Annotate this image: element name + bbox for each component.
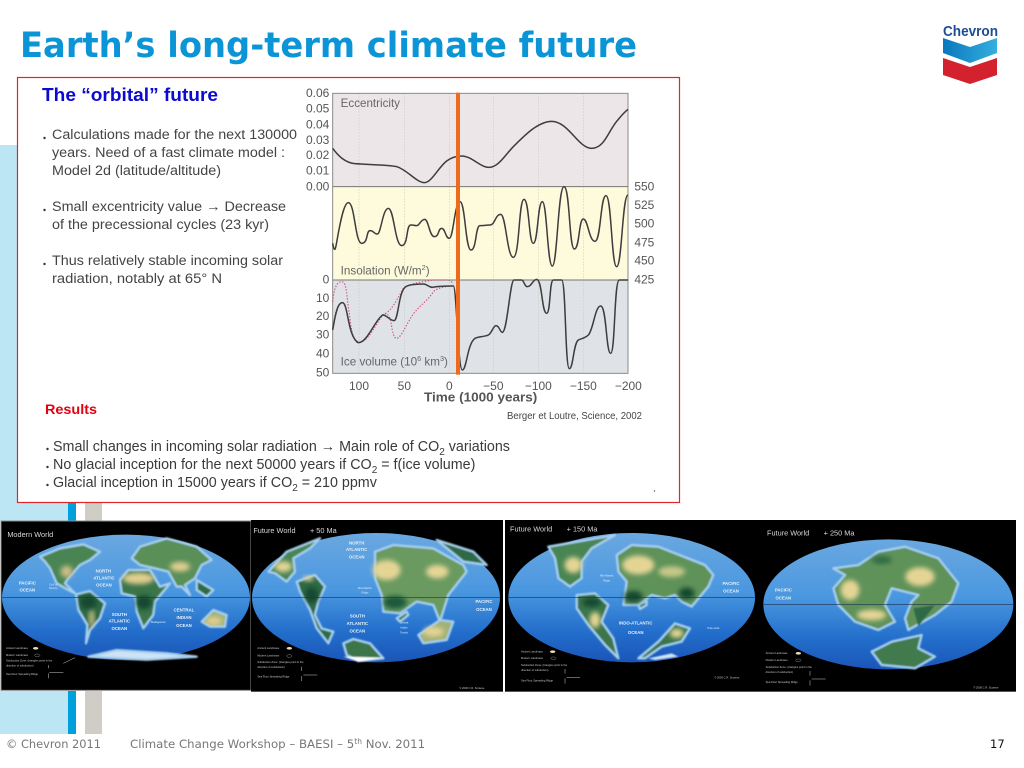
- map labels: OCEAN: [776, 596, 791, 601]
- text block: orbital bullets: Small excentricity value → Decrease: [52, 199, 286, 215]
- chart band: eccentricity: [333, 93, 628, 187]
- map legend: direction of subduction): [766, 670, 793, 674]
- axis labels: time: −50: [483, 379, 504, 393]
- map legend: © 2000 C.R. Scotese: [714, 675, 740, 679]
- axis labels: insolation scale: 550: [634, 179, 655, 193]
- text block: results bullets: = f(ice volume): [377, 457, 475, 473]
- map legend: Ancient Landmass: [766, 651, 788, 655]
- map legend: Subduction Zone: (triangles point in the: [766, 665, 812, 669]
- map legend: [257, 646, 485, 690]
- map labels: ATLANTIC: [346, 547, 367, 552]
- text block: results bullets: = 210 ppmv: [298, 475, 378, 491]
- map legend: Modern Landmass: [6, 653, 29, 657]
- map labels: OCEAN: [723, 588, 739, 593]
- axis labels: ice volume scale: 50: [316, 365, 330, 379]
- footer: workshop: Climate Change Workshop – BAESI – 5: [130, 737, 354, 751]
- axis labels: eccentricity scale: 0.03: [306, 133, 330, 147]
- map labels: Trench: [400, 630, 409, 634]
- map labels: Future World: [253, 526, 296, 535]
- marker: present-day orange bar: [456, 93, 460, 375]
- band label: ice volume: Ice volume (10: [341, 355, 417, 368]
- citation: Berger et Loutre, Science, 2002: [507, 410, 642, 422]
- line: insolation: [333, 187, 628, 267]
- text block: results bullets: Glacial inception in 15000 years if CO: [53, 475, 292, 491]
- map labels: + 250 Ma: [824, 528, 855, 537]
- map legend: Ancient Landmass: [6, 646, 29, 650]
- map labels: Future World: [767, 528, 809, 537]
- axis labels: eccentricity scale: 0.04: [306, 117, 330, 131]
- band label: insolation: Insolation (W/m: [341, 264, 422, 277]
- ice volume dotted record: [333, 280, 453, 343]
- logo: Chevron: [943, 24, 998, 84]
- map labels: Madagascar: [151, 620, 166, 624]
- map: Future World +50 Ma: [251, 520, 503, 692]
- map labels: [767, 528, 855, 601]
- text block: results bullets: 2: [292, 483, 298, 494]
- axis title: Time (1000 years): [424, 390, 537, 405]
- map labels: Ridge: [603, 579, 611, 583]
- text block: orbital bullets: Calculations made for the next 130000: [52, 127, 297, 143]
- map legend: direction of subduction): [6, 663, 34, 667]
- axis labels: insolation scale: 450: [634, 254, 655, 268]
- map labels: SOUTH: [112, 612, 127, 617]
- map labels: PACIFIC: [475, 599, 492, 604]
- map labels: + 50 Ma: [310, 526, 338, 535]
- map labels: Central: [400, 620, 409, 624]
- axis labels: time: −200: [615, 379, 642, 393]
- map labels: ATLANTIC: [109, 619, 130, 624]
- axis labels: insolation scale: 425: [634, 272, 655, 286]
- footer: copyright: © Chevron 2011: [6, 737, 101, 751]
- axis labels: eccentricity scale: [306, 86, 330, 194]
- axis labels: ice volume scale: 40: [316, 346, 330, 360]
- axis labels: time: −100: [525, 379, 552, 393]
- map legend: Subduction Zone: (triangles point in the: [257, 660, 304, 664]
- axis labels: time: −150: [570, 379, 597, 393]
- band label: insolation: 2: [422, 263, 426, 272]
- map labels: OCEAN: [628, 630, 643, 635]
- band label: ice volume: 3: [440, 354, 444, 363]
- map labels: Future World: [510, 524, 552, 533]
- map labels: OCEAN: [176, 623, 192, 628]
- heading: results: Results: [45, 402, 97, 417]
- map labels: NORTH: [349, 540, 364, 545]
- map labels: CENTRAL: [174, 608, 195, 613]
- map labels: PACIFIC: [775, 588, 792, 593]
- axis labels: eccentricity scale: 0.00: [306, 180, 330, 194]
- map labels: OCEAN: [112, 626, 127, 631]
- footer: workshop: th: [354, 737, 362, 746]
- map labels: OCEAN: [349, 554, 364, 559]
- map legend: Sea Floor Spreading Ridge: [766, 680, 798, 684]
- map labels: Pole-strait: [707, 626, 720, 630]
- map labels: [7, 530, 195, 631]
- map labels: Mexico: [49, 586, 58, 590]
- map legend: Subduction Zone: (triangles point in the: [6, 658, 53, 662]
- land: [548, 535, 713, 658]
- text block: results bullets: [46, 439, 655, 494]
- text block: results bullets: No glacial inception for the next 50000 years if CO: [53, 457, 372, 473]
- title: Earth’s long-term climate future: [20, 26, 637, 66]
- chart: eccentricity, insolation, ice volume: [306, 86, 655, 405]
- map labels: Indian: [400, 625, 408, 629]
- axis labels: ice volume scale: 10: [316, 291, 330, 305]
- map: Modern World: [1, 521, 251, 690]
- map legend: Ancient Landmass: [257, 646, 280, 650]
- map labels: NORTH: [96, 568, 111, 573]
- map labels: PACIFIC: [722, 581, 739, 586]
- map labels: Ridge: [362, 590, 369, 594]
- axis labels: insolation scale: 475: [634, 235, 655, 249]
- map labels: Mid-Atlantic: [600, 573, 614, 577]
- text block: orbital bullets: Model 2d (latitude/altitude): [52, 163, 221, 179]
- left decorative colour bands: [0, 145, 102, 734]
- text block: results bullets: 2: [372, 465, 378, 476]
- map labels: OCEAN: [20, 588, 35, 593]
- land: [833, 547, 958, 668]
- axis labels: ice volume scale: 0: [323, 273, 330, 287]
- map legend: direction of subduction): [521, 668, 549, 672]
- land: [40, 538, 227, 660]
- chart band: ice volume: [333, 280, 628, 373]
- text block: orbital bullets: of the precessional cycles (23 kyr): [52, 217, 269, 233]
- axis labels: time: [349, 379, 642, 393]
- map legend: [521, 649, 740, 684]
- band label: eccentricity: Eccentricity: [341, 97, 400, 110]
- panel: orbital future: [18, 78, 680, 502]
- map labels: PACIFIC: [19, 580, 36, 585]
- map labels: Mid-Atlantic: [358, 586, 373, 590]
- axis labels: ice volume scale: 30: [316, 327, 330, 341]
- axis labels: time: 50: [398, 379, 411, 393]
- map legend: Modern Landmass: [521, 656, 544, 660]
- map legend: Subduction Zone: (triangles point in the: [521, 663, 568, 667]
- axis labels: time: 0: [446, 379, 453, 393]
- line: eccentricity: [333, 109, 628, 183]
- text block: orbital bullets: years. Need of a fast climate model :: [52, 145, 285, 161]
- axis labels: insolation scale: [634, 179, 655, 286]
- map legend: [6, 646, 75, 678]
- map legend: [766, 651, 999, 690]
- axis labels: insolation scale: 500: [634, 217, 655, 231]
- footer: page number: 17: [990, 737, 1005, 751]
- map legend: Ancient Landmass: [521, 649, 544, 653]
- footer: workshop: Nov. 2011: [362, 737, 425, 751]
- axis labels: eccentricity scale: 0.02: [306, 148, 330, 162]
- band label: ice volume: 6: [417, 354, 421, 363]
- heading: orbital future: The “orbital” future: [42, 85, 218, 105]
- axis labels: ice volume scale: [316, 273, 330, 379]
- map labels: + 150 Ma: [567, 524, 598, 533]
- axis labels: insolation scale: 525: [634, 198, 655, 212]
- band label: ice volume: ): [444, 355, 448, 368]
- map labels: [510, 524, 739, 635]
- map: Future World +150 Ma: [505, 520, 760, 692]
- text block: results bullets: 2: [439, 447, 445, 458]
- text block: orbital bullets: [43, 127, 297, 287]
- logo: Chevron: Chevron: [943, 24, 998, 40]
- text block: results bullets: Small changes in incoming solar radiation → Main role of CO: [53, 439, 439, 455]
- text block: orbital bullets: radiation, notably at 65° N: [52, 271, 222, 287]
- land: [268, 538, 487, 661]
- map legend: direction of subduction): [257, 665, 285, 669]
- map labels: [253, 526, 492, 634]
- band label: ice volume: km: [421, 355, 440, 368]
- map: Future World +250 Ma: [760, 520, 1016, 692]
- axis labels: eccentricity scale: 0.01: [306, 164, 330, 178]
- map labels: ATLANTIC: [347, 621, 368, 626]
- axis labels: eccentricity scale: 0.05: [306, 102, 330, 116]
- chart band: insolation: [333, 187, 628, 280]
- line: ice volume: [333, 279, 628, 370]
- map legend: © 2000 C.R. Scotese: [459, 686, 485, 690]
- map legend: Modern Landmass: [766, 658, 788, 662]
- map legend: Sea Floor Spreading Ridge: [6, 672, 39, 676]
- map labels: OCEAN: [350, 628, 365, 633]
- map labels: SOUTH: [350, 614, 365, 619]
- map labels: INDO-ATLANTIC: [619, 621, 652, 626]
- text block: orbital bullets: Thus relatively stable incoming solar: [52, 253, 283, 269]
- map labels: Modern World: [7, 530, 53, 539]
- map legend: Sea Floor Spreading Ridge: [521, 679, 554, 683]
- map labels: Gulf of: [49, 583, 58, 587]
- band label: insolation: ): [426, 264, 430, 277]
- axis labels: ice volume scale: 20: [316, 309, 330, 323]
- map labels: ATLANTIC: [93, 575, 115, 580]
- axis labels: time: 100: [349, 379, 369, 393]
- map legend: Sea Floor Spreading Ridge: [257, 674, 290, 678]
- map labels: INDIAN: [177, 615, 191, 620]
- map legend: Modern Landmass: [257, 653, 280, 657]
- map labels: OCEAN: [96, 582, 112, 587]
- map labels: OCEAN: [476, 607, 492, 612]
- text block: results bullets: variations: [445, 439, 510, 455]
- map legend: © 2000 C.R. Scotese: [973, 686, 999, 690]
- axis labels: eccentricity scale: 0.06: [306, 86, 330, 100]
